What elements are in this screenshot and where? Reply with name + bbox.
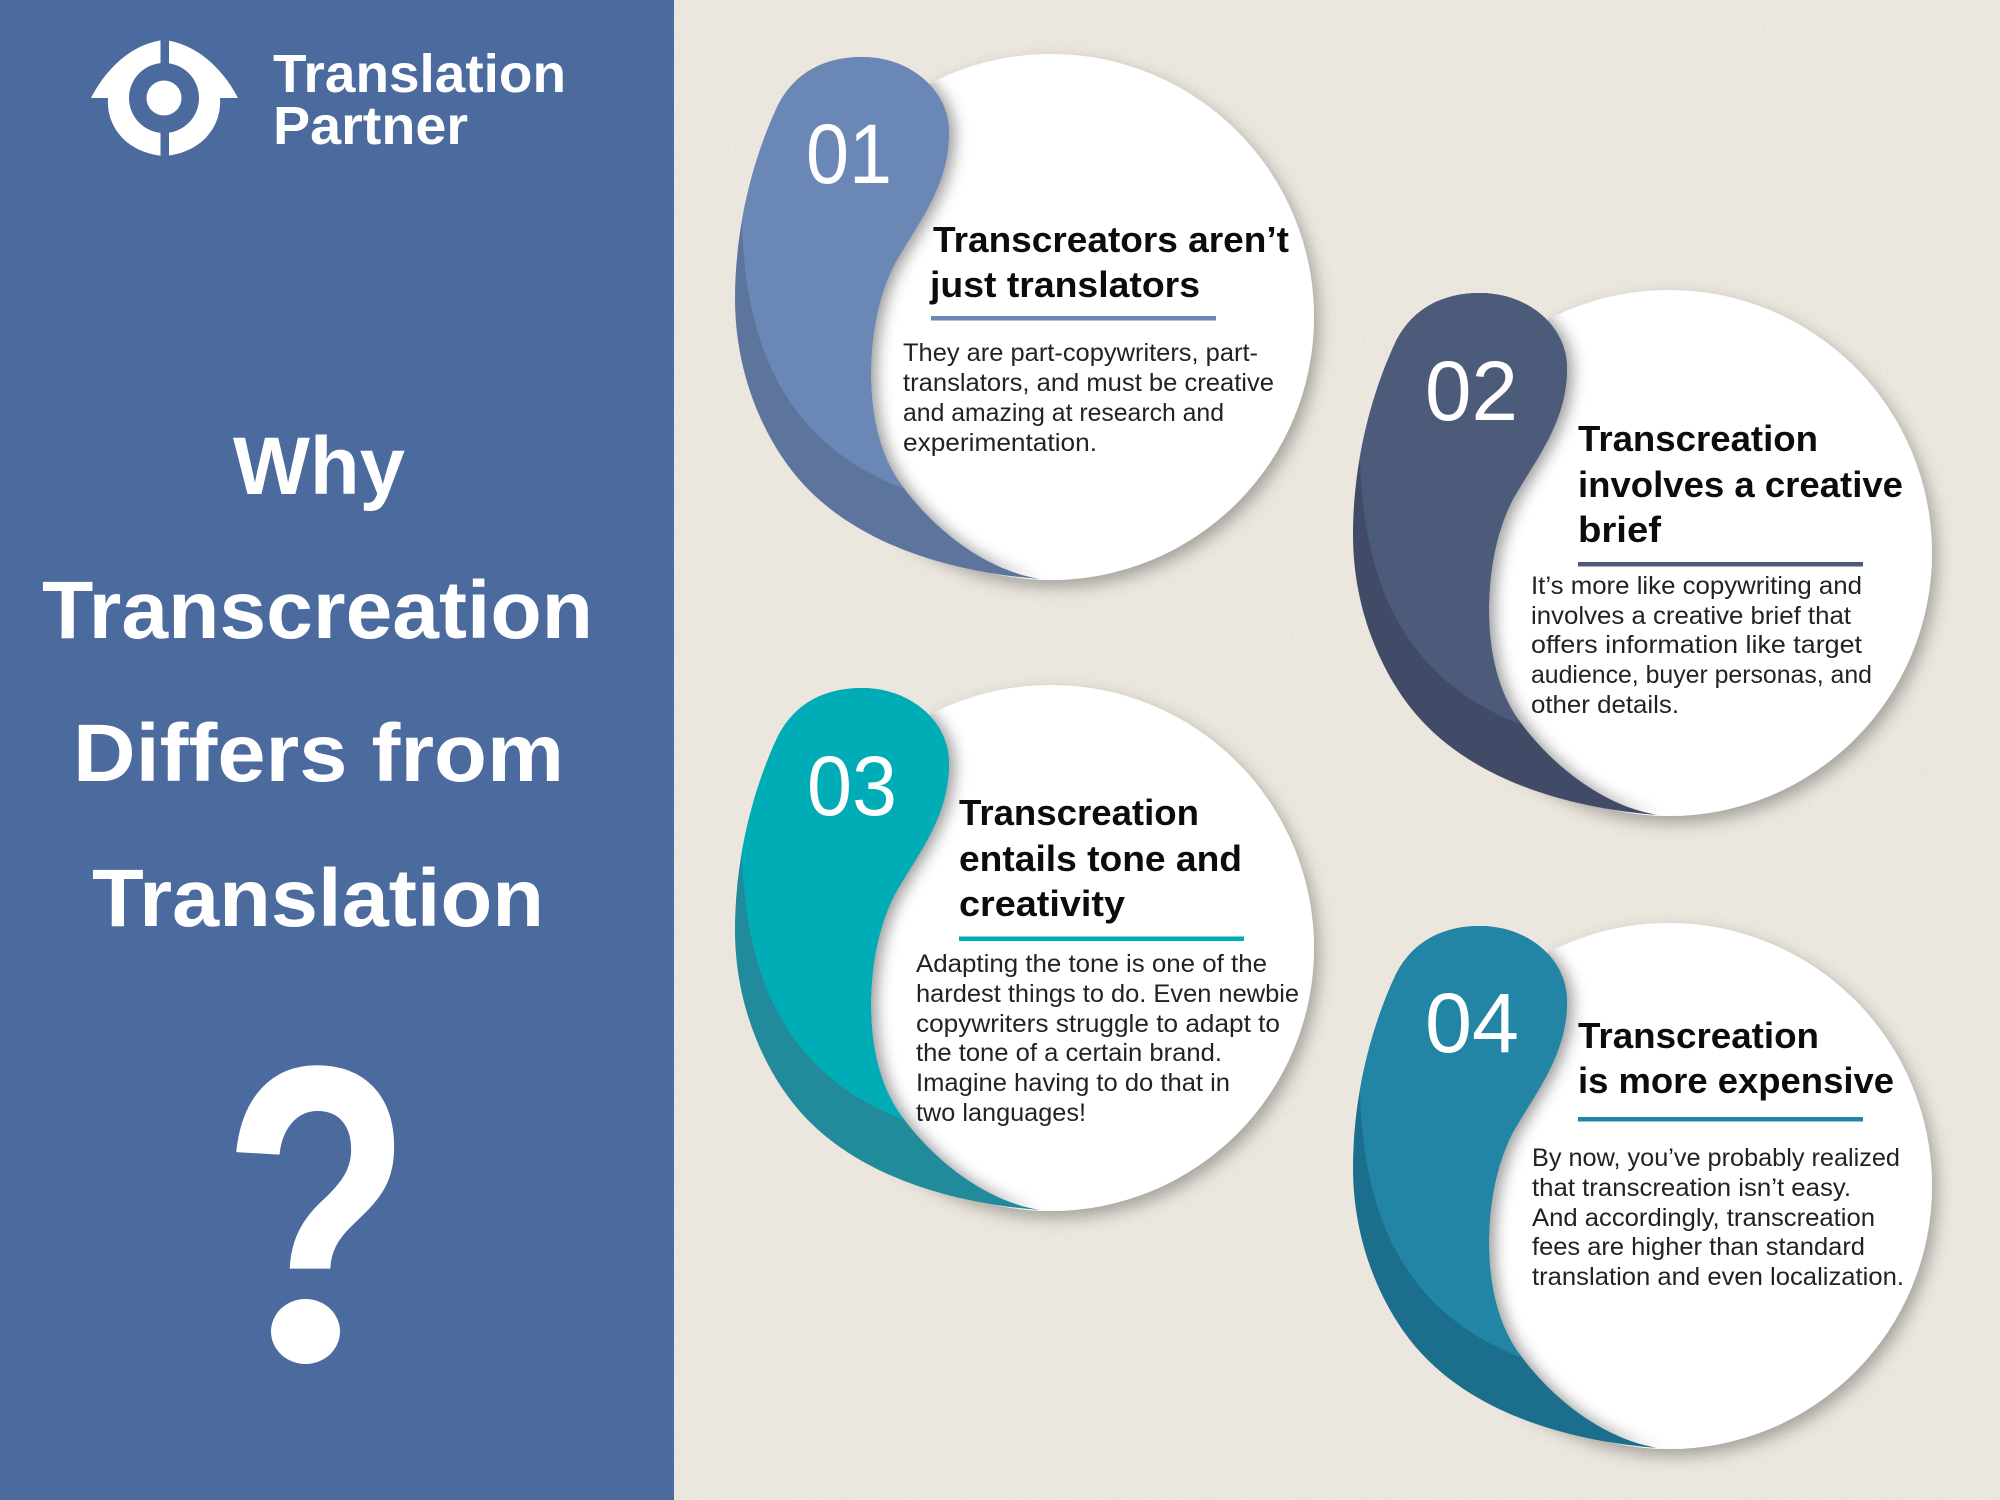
number 01: 01 xyxy=(806,107,892,201)
heading 02: Transcreation xyxy=(1578,418,1818,459)
card shape 02 xyxy=(1318,266,1932,817)
icon: logo mark xyxy=(91,38,238,158)
heading 03 xyxy=(959,792,1242,924)
body text 04: fees are higher than standard xyxy=(1532,1233,1865,1261)
number 04: 04 xyxy=(1425,976,1519,1070)
card shape 03 xyxy=(700,661,1314,1212)
heading 03: Transcreation xyxy=(959,792,1199,833)
body text 04: translation and even localization. xyxy=(1532,1263,1904,1291)
heading 02: involves a creative xyxy=(1578,464,1903,505)
rule 03 xyxy=(959,936,1244,941)
number 02: 02 xyxy=(1425,344,1518,438)
heading 01 xyxy=(929,219,1289,305)
body text 03: hardest things to do. Even newbie xyxy=(916,980,1299,1008)
panel: card 03 xyxy=(700,661,1314,1212)
body text 01: They are part-copywriters, part- xyxy=(903,339,1258,367)
card shape 04 xyxy=(1318,899,1932,1450)
question mark: ? xyxy=(222,979,412,1443)
panel: left sidebar xyxy=(0,0,674,1500)
body text 04 xyxy=(1532,1144,1904,1291)
heading 04: Transcreation xyxy=(1578,1015,1819,1056)
rule 04 xyxy=(1578,1117,1863,1122)
main heading: Why xyxy=(233,421,405,512)
body text 04: And accordingly, transcreation xyxy=(1532,1204,1875,1232)
main heading: Transcreation xyxy=(42,565,593,656)
main heading xyxy=(42,421,593,944)
panel: card 01 xyxy=(700,30,1314,581)
body text 02: involves a creative brief that xyxy=(1531,602,1851,630)
body text 01 xyxy=(903,339,1274,457)
heading 02: brief xyxy=(1578,509,1662,550)
card shape 01 xyxy=(700,30,1314,581)
panel: card 02 xyxy=(1318,266,1932,817)
rule 02 xyxy=(1578,562,1863,566)
body text 04: By now, you’ve probably realized xyxy=(1532,1144,1900,1172)
logo wordmark: Partner xyxy=(273,96,468,156)
logo xyxy=(91,38,566,158)
heading 03: entails tone and xyxy=(959,838,1242,879)
body text 02 xyxy=(1531,572,1872,719)
body text 01: translators, and must be creative xyxy=(903,369,1274,397)
body text 02: audience, buyer personas, and xyxy=(1531,661,1872,689)
logo wordmark: Translation xyxy=(273,44,566,104)
heading 04 xyxy=(1578,1015,1894,1101)
rule 01 xyxy=(931,316,1216,320)
body text 01: and amazing at research and xyxy=(903,399,1224,427)
heading 03: creativity xyxy=(959,883,1125,924)
logo wordmark xyxy=(273,44,566,156)
body text 02: It’s more like copywriting and xyxy=(1531,572,1862,600)
panel: card 04 xyxy=(1318,899,1932,1450)
heading 01: just translators xyxy=(929,264,1200,305)
paper background xyxy=(674,0,2000,1500)
heading 02 xyxy=(1578,418,1903,550)
body text 03: two languages! xyxy=(916,1099,1086,1127)
number 03: 03 xyxy=(807,739,897,833)
body text 03: copywriters struggle to adapt to xyxy=(916,1010,1280,1038)
body text 03: Adapting the tone is one of the xyxy=(916,950,1267,978)
main heading: Differs from xyxy=(73,708,564,799)
body text 03: Imagine having to do that in xyxy=(916,1069,1230,1097)
body text 02: other details. xyxy=(1531,691,1679,719)
body text 02: offers information like target xyxy=(1531,631,1862,659)
body text 04: that transcreation isn’t easy. xyxy=(1532,1174,1851,1202)
body text 03: the tone of a certain brand. xyxy=(916,1039,1222,1067)
body text 01: experimentation. xyxy=(903,429,1097,457)
heading 04: is more expensive xyxy=(1578,1060,1894,1101)
body text 03 xyxy=(916,950,1299,1127)
heading 01: Transcreators aren’t xyxy=(933,219,1289,260)
main heading: Translation xyxy=(92,853,544,944)
